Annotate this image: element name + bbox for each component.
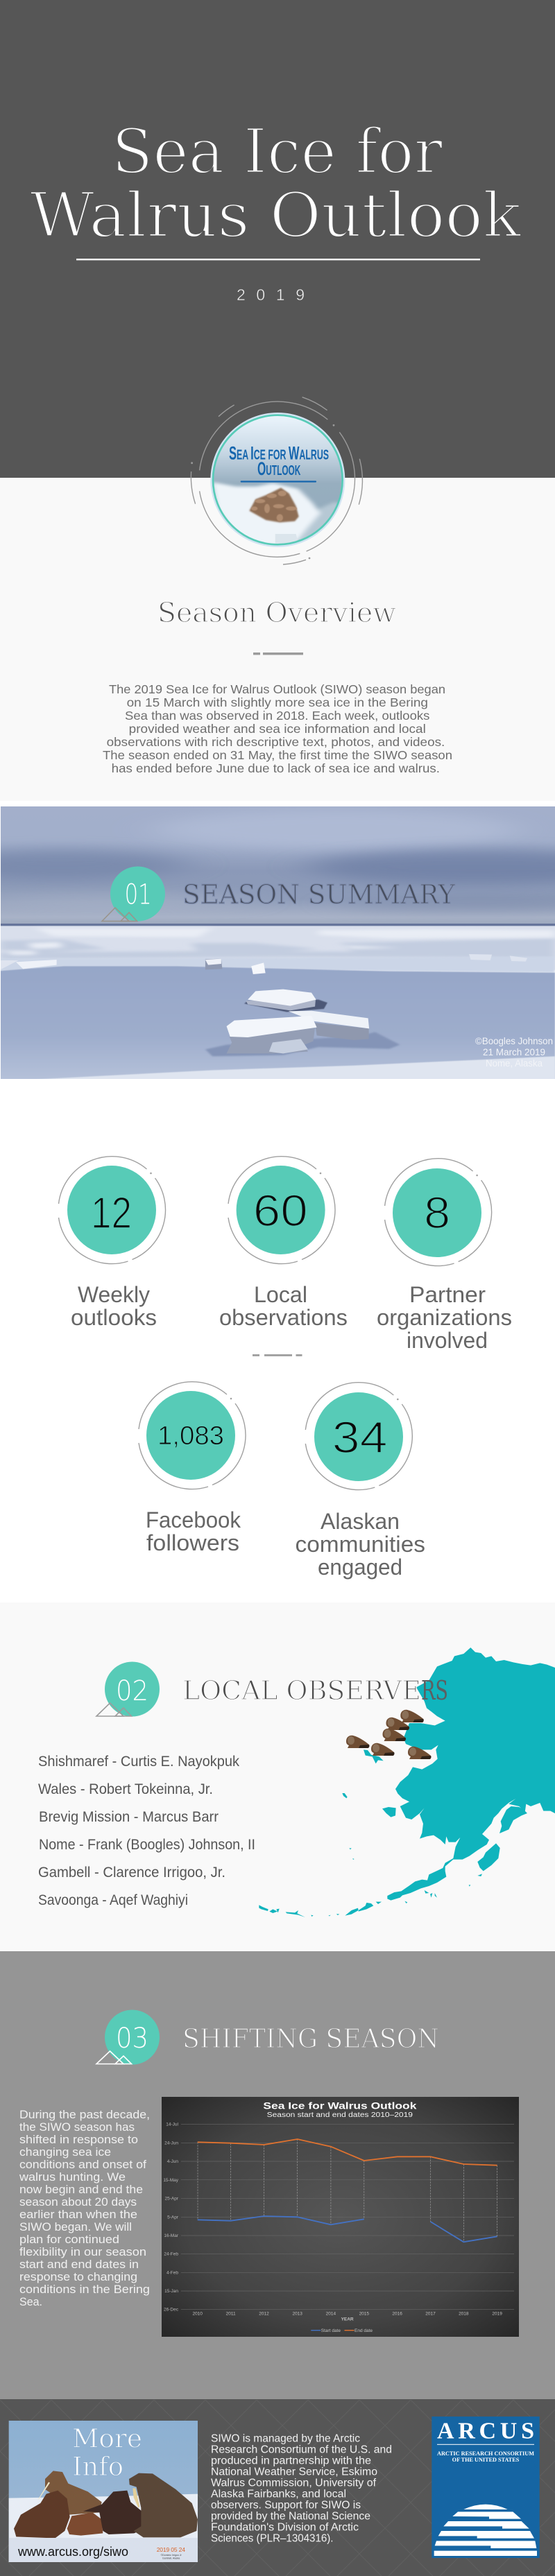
icon: mountains xyxy=(96,1703,132,1716)
chart legend xyxy=(311,2328,373,2333)
chart legend: End date xyxy=(355,2328,373,2333)
photo credit: ©Boogles Johnson xyxy=(475,1036,553,1046)
season text: conditions in the Bering xyxy=(19,2283,150,2296)
management text: Foundation's Division of Arctic xyxy=(211,2521,359,2534)
divider xyxy=(253,1354,302,1356)
photo of sea ice xyxy=(0,804,555,1082)
image credit: ©Dominic Irrigoo Jr xyxy=(161,2554,182,2557)
overview text: The season ended on 31 May, the first time the SIWO season xyxy=(103,748,452,762)
overview text: provided weather and sea ice information and local xyxy=(129,722,426,736)
stat: alaskan communities xyxy=(296,1383,425,1580)
icon: mountains xyxy=(96,2051,132,2064)
gridlines xyxy=(181,2124,514,2309)
management text: Sciences (PLR–1304316). xyxy=(211,2532,333,2545)
season text: shifted in response to xyxy=(19,2133,138,2146)
overview text: has ended before June due to lack of sea ice and walrus. xyxy=(112,761,440,775)
ARCUS logo: ARCUS xyxy=(437,2419,534,2444)
stat: facebook followers: Facebook xyxy=(146,1507,241,1532)
x axis labels: YEAR xyxy=(341,2317,354,2322)
logo text: OUTLOOK xyxy=(257,458,301,479)
stat: weekly outlooks xyxy=(58,1157,166,1330)
panel: shifting season xyxy=(0,1951,555,2399)
ARCUS logo: ARCTIC RESEARCH CONSORTIUM xyxy=(437,2450,534,2457)
overview text: observations with rich descriptive text, photos, and videos. xyxy=(107,735,445,749)
logo rings xyxy=(191,397,362,564)
x axis labels: 2018 xyxy=(459,2312,469,2317)
list of observers: Wales - Robert Tokeinna, Jr. xyxy=(38,1781,213,1797)
y axis labels: 15-May xyxy=(163,2178,179,2183)
heading: local observers: LOCAL OBSERVE xyxy=(182,1675,421,1706)
y axis labels: 25-Apr xyxy=(164,2197,179,2201)
list of observers: Shishmaref - Curtis E. Nayokpuk xyxy=(38,1754,239,1770)
photo credit: 21 March 2019 xyxy=(483,1047,545,1057)
panel: local observers xyxy=(0,1602,555,1951)
logo text: SEA ICE FOR WALRUS xyxy=(229,443,329,464)
y axis labels xyxy=(163,2122,179,2312)
title xyxy=(30,115,522,251)
start date line xyxy=(198,2216,364,2224)
season text: earlier than when the xyxy=(19,2208,137,2221)
management text: SIWO is managed by the Arctic xyxy=(211,2432,360,2445)
management text: observers. Support for SIWO is xyxy=(211,2499,361,2512)
image credit xyxy=(161,2554,182,2560)
end date line xyxy=(198,2139,497,2166)
x axis labels: 2012 xyxy=(259,2312,269,2317)
more info text xyxy=(72,2423,142,2482)
stat: facebook followers xyxy=(139,1382,246,1555)
overview text: The 2019 Sea Ice for Walrus Outlook (SIWO) season began xyxy=(109,682,445,696)
stat: alaskan communities: 34 xyxy=(332,1412,388,1462)
x axis labels: 2013 xyxy=(292,2312,302,2317)
chart title xyxy=(263,2100,417,2119)
panel: key statistics xyxy=(0,1079,555,1602)
icon: mountains xyxy=(102,908,137,921)
list of observers: Gambell - Clarence Irrigoo, Jr. xyxy=(38,1865,225,1881)
chart title: Season start and end dates 2010–2019 xyxy=(267,2111,413,2119)
title: Walrus Outlook xyxy=(30,179,522,251)
y axis labels: 15-Jan xyxy=(164,2289,178,2294)
season text xyxy=(19,2108,150,2308)
heading: season summary: SEASON SUMMARY xyxy=(182,879,456,910)
badge 03: 03 xyxy=(116,2023,148,2055)
stat: local observations: Local xyxy=(254,1282,307,1307)
logo badge xyxy=(191,397,362,564)
season text: season about 20 days xyxy=(19,2195,137,2208)
line chart: season start and end dates xyxy=(162,2097,519,2337)
badge 02: 02 xyxy=(116,1675,148,1707)
image credit: Gambell, Alaska xyxy=(162,2557,180,2560)
divider xyxy=(253,652,303,655)
x axis labels xyxy=(192,2312,502,2322)
title: Sea Ice for xyxy=(112,115,443,187)
ARCUS dome xyxy=(434,2505,537,2556)
stat: partner organizations xyxy=(377,1159,512,1353)
y axis labels: 14-Jul xyxy=(166,2122,179,2127)
overview text xyxy=(103,682,452,775)
y axis labels: 26-Dec xyxy=(164,2308,179,2312)
y axis labels: 4-Jun xyxy=(167,2159,178,2164)
management text: National Weather Service, Eskimo xyxy=(211,2466,377,2478)
more info text: More xyxy=(72,2423,142,2453)
season text: the SIWO season has xyxy=(19,2120,135,2134)
y axis labels: 4-Feb xyxy=(166,2270,178,2276)
logo disc xyxy=(210,413,349,548)
photo credit xyxy=(475,1036,553,1069)
map of Alaska xyxy=(259,1648,555,1917)
y axis labels: 5-Apr xyxy=(167,2215,179,2220)
management text: produced in partnership with the xyxy=(211,2455,371,2467)
more info text: Info xyxy=(72,2452,123,2482)
management text xyxy=(211,2432,392,2545)
title rule xyxy=(76,259,480,260)
logo text xyxy=(229,443,329,483)
x axis labels: 2014 xyxy=(326,2312,336,2317)
heading: season overview: Season Overview xyxy=(157,598,396,629)
badge 02 xyxy=(96,1661,160,1717)
panel: season overview xyxy=(0,478,555,801)
year: 2 0 1 9 xyxy=(237,286,305,304)
stat: weekly outlooks: Weekly xyxy=(78,1282,150,1307)
photo credit: Nome, Alaska xyxy=(486,1058,543,1069)
list of observers: Savoonga - Aqef Waghiyi xyxy=(38,1892,188,1908)
stat: partner organizations: 8 xyxy=(424,1188,450,1238)
image date: 2019 05 24 xyxy=(157,2546,185,2553)
x axis labels: 2011 xyxy=(226,2312,236,2317)
stat: partner organizations: Partner xyxy=(409,1282,486,1307)
stat: local observations: 60 xyxy=(253,1186,308,1236)
heading: local observers: RS xyxy=(421,1675,448,1706)
y axis labels: 24-Jun xyxy=(164,2141,178,2145)
season text: Sea. xyxy=(19,2295,42,2308)
season text: response to changing xyxy=(19,2270,137,2283)
badge 01 xyxy=(102,867,165,921)
list of observers xyxy=(38,1754,255,1908)
x axis labels: 2019 xyxy=(492,2312,502,2317)
chart title: Sea Ice for Walrus Outlook xyxy=(263,2100,417,2111)
walrus markers xyxy=(346,1710,431,1759)
list of observers: Nome - Frank (Boogles) Johnson, II xyxy=(39,1837,255,1853)
season text: During the past decade, xyxy=(19,2108,150,2121)
management text: provided by the National Science xyxy=(211,2510,370,2523)
season text: start and end dates in xyxy=(19,2258,139,2271)
stat: weekly outlooks: 12 xyxy=(91,1188,132,1238)
stat: facebook followers: followers xyxy=(146,1530,239,1555)
stat: facebook followers: 1,083 xyxy=(157,1421,224,1451)
overview text: Sea than was observed in 2018. Each week, outlooks xyxy=(125,709,430,723)
panel: footer xyxy=(0,2399,555,2576)
season text: flexibility in our season xyxy=(19,2245,146,2258)
management text: Alaska Fairbanks, and local xyxy=(211,2488,346,2500)
stat: alaskan communities: Alaskan xyxy=(321,1509,400,1534)
season text: SIWO began. We will xyxy=(19,2220,132,2233)
heading: shifting season: SHIFTING SEASON xyxy=(182,2023,439,2054)
stat: partner organizations: organizations xyxy=(377,1305,512,1330)
x axis labels: 2010 xyxy=(192,2312,203,2317)
overview text: on 15 March with slightly more sea ice in the Bering xyxy=(127,695,428,709)
x axis labels: 2017 xyxy=(425,2312,436,2317)
dashed connectors xyxy=(198,2139,497,2242)
ARCUS logo xyxy=(432,2417,540,2558)
photo panel: season summary xyxy=(0,804,555,1082)
season text: conditions and onset of xyxy=(19,2158,146,2171)
y axis labels: 16-Mar xyxy=(164,2233,179,2238)
list of observers: Brevig Mission - Marcus Barr xyxy=(39,1809,219,1825)
chart legend: Start date xyxy=(321,2328,341,2333)
more info image with walruses xyxy=(9,2421,198,2562)
stat: local observations xyxy=(219,1157,348,1330)
stat: partner organizations: involved xyxy=(407,1328,488,1353)
hero panel xyxy=(0,0,555,478)
management text: Research Consortium of the U.S. and xyxy=(211,2444,392,2456)
stat: weekly outlooks: outlooks xyxy=(71,1305,157,1330)
season text: plan for continued xyxy=(19,2233,119,2246)
badge 01: 01 xyxy=(125,879,152,910)
x axis labels: 2015 xyxy=(359,2312,369,2317)
stat: alaskan communities: engaged xyxy=(318,1555,402,1580)
stat: alaskan communities: communities xyxy=(296,1532,425,1557)
season text: now begin and end the xyxy=(19,2183,143,2196)
website: www.arcus.org/siwo xyxy=(17,2545,128,2559)
y axis labels: 24-Feb xyxy=(164,2252,178,2256)
season text: changing sea ice xyxy=(19,2145,111,2159)
season text: walrus hunting. We xyxy=(19,2170,126,2184)
x axis labels: 2016 xyxy=(392,2312,402,2317)
management text: Walrus Commission, University of xyxy=(211,2477,377,2489)
ARCUS logo: OF THE UNITED STATES xyxy=(452,2457,520,2463)
stat: local observations: observations xyxy=(219,1305,348,1330)
badge 03 xyxy=(96,2009,160,2065)
